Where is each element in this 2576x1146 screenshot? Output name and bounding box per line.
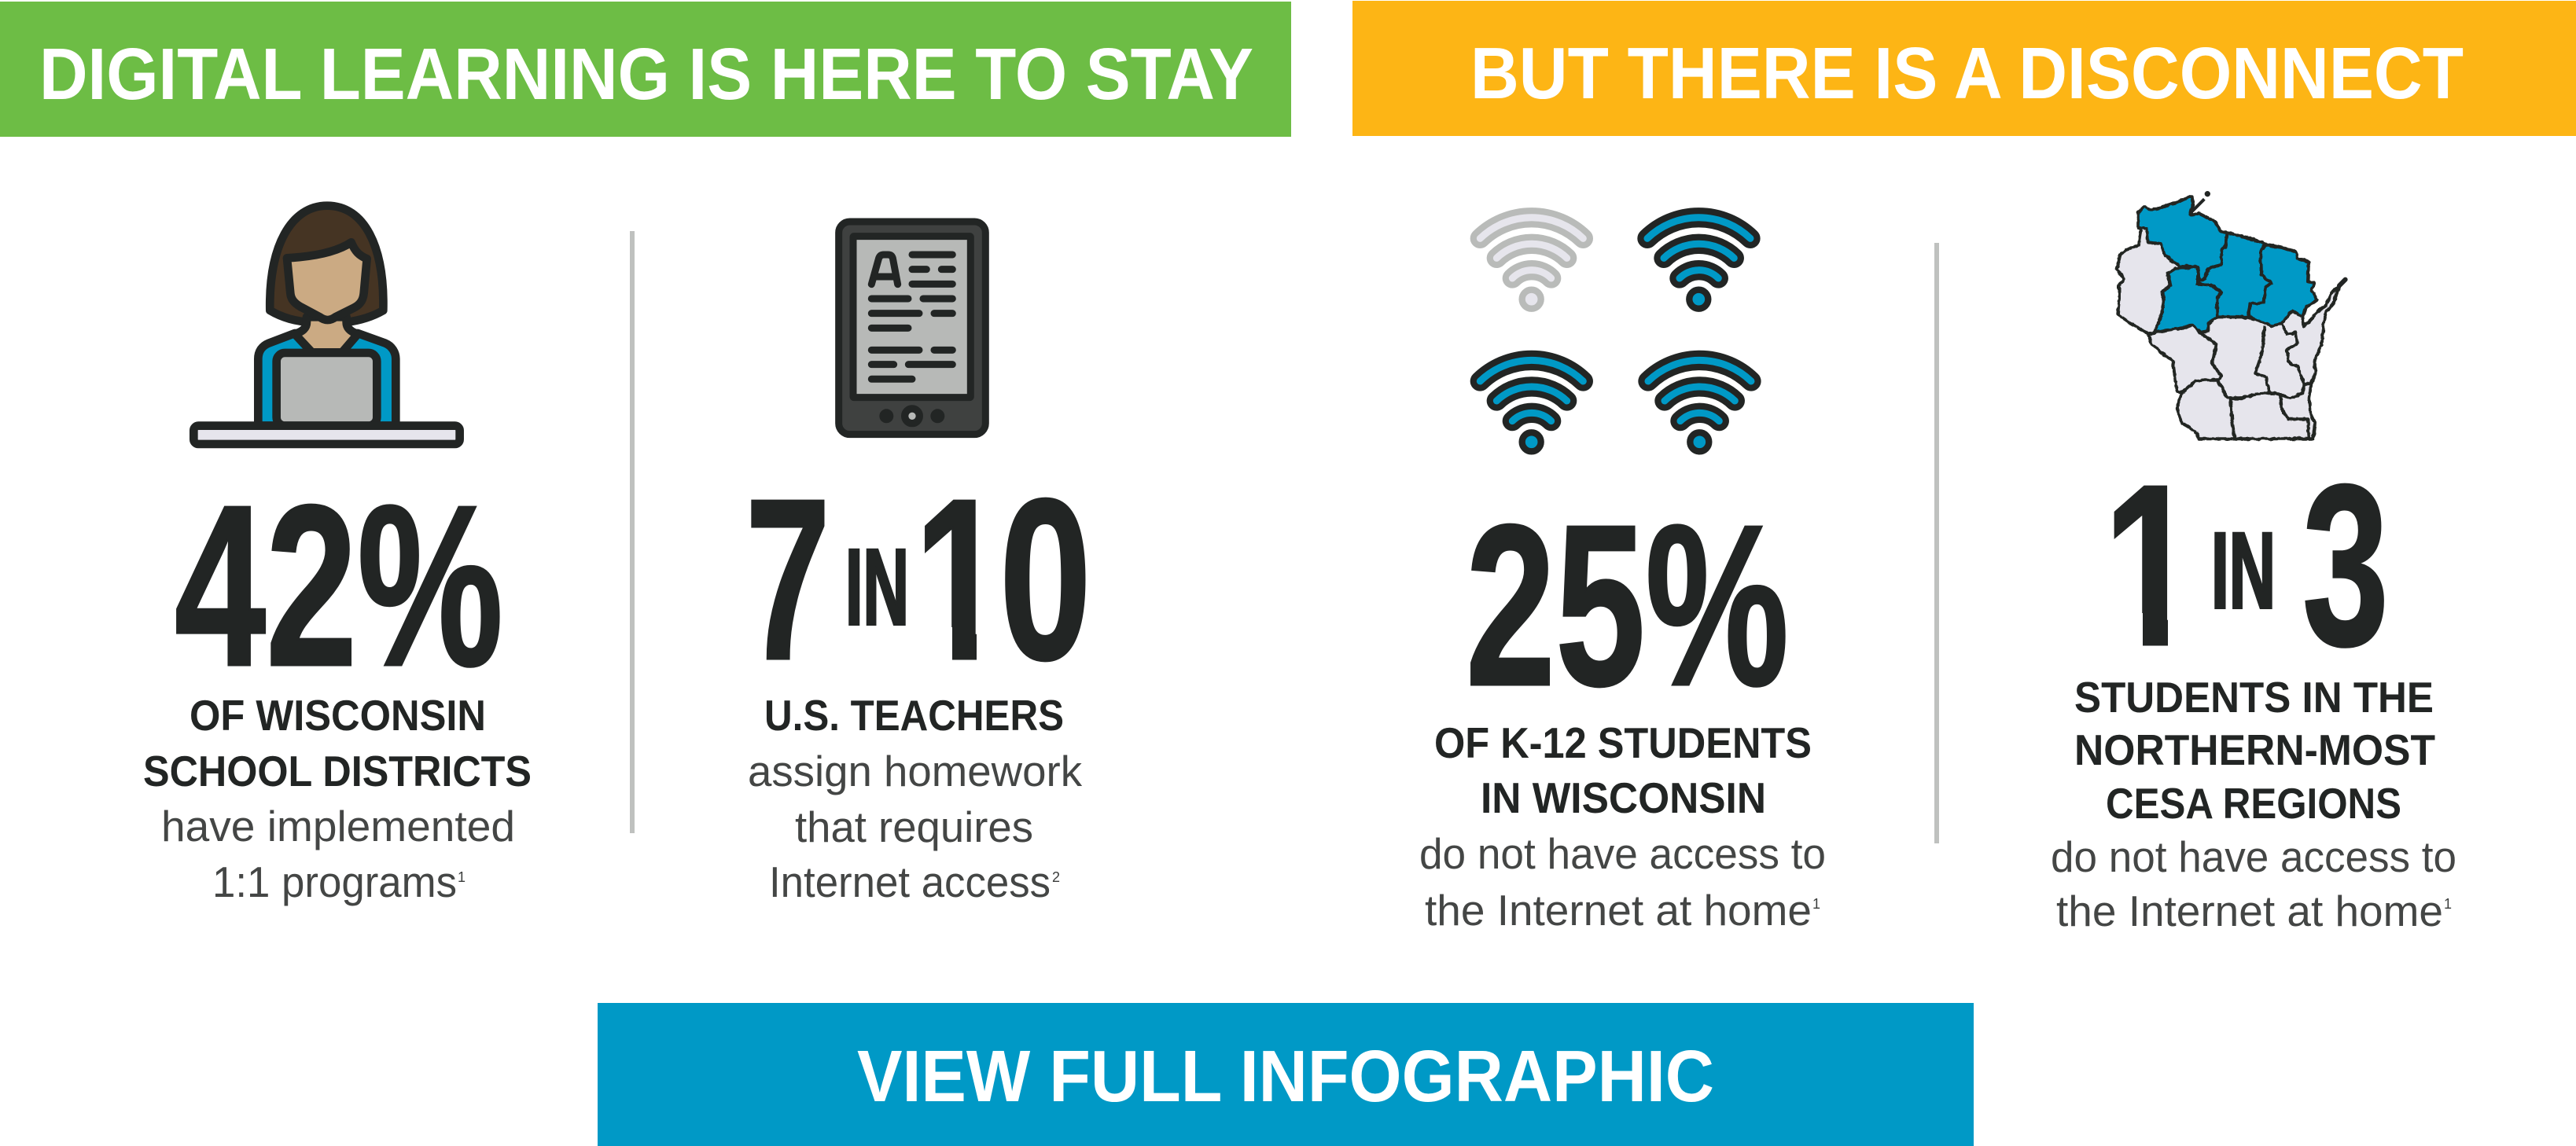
description: 1:1 programs xyxy=(212,858,457,906)
subhead xyxy=(2074,673,2435,828)
panel: 7 in 10 teachers xyxy=(745,222,1091,906)
divider xyxy=(1934,243,1939,843)
description: the Internet at home xyxy=(1425,886,1812,935)
description: assign homework xyxy=(748,747,1082,795)
divider xyxy=(630,231,635,833)
banner: digital learning xyxy=(0,2,1291,137)
button: view full infographic xyxy=(598,1003,1974,1146)
description xyxy=(1419,829,1826,935)
description xyxy=(161,802,515,906)
stat: 7 in 10 xyxy=(751,497,1085,662)
description: that requires xyxy=(795,803,1033,851)
description: have implemented xyxy=(161,802,515,850)
icon: person at laptop xyxy=(193,206,460,444)
stat: 7 in 10: 1 xyxy=(914,451,1005,707)
description xyxy=(748,747,1082,906)
icon: Wisconsin CESA map xyxy=(2117,193,2346,439)
description: do not have access to xyxy=(2051,832,2456,881)
subhead: OF K-12 STUDENTS xyxy=(1434,718,1812,767)
icon: wifi blue 1 xyxy=(1647,218,1750,309)
description: 2 xyxy=(1052,869,1060,885)
banner: digital learning: DIGITAL LEARNING IS HERE TO STAY xyxy=(39,33,1253,115)
banner: disconnect: BUT THERE IS A DISCONNECT xyxy=(1470,32,2464,114)
subhead: IN WISCONSIN xyxy=(1481,773,1766,822)
button: view full infographic: VIEW FULL INFOGRAPHIC xyxy=(857,1035,1714,1117)
description: 1 xyxy=(2444,896,2452,912)
stat: 1 in 3: 1 xyxy=(2103,437,2198,693)
icon: wifi gray xyxy=(1480,218,1583,309)
icon: wifi blue 3 xyxy=(1648,360,1751,451)
stat: 7 in 10: 7 xyxy=(745,451,830,707)
icon: wifi blue 2 xyxy=(1480,360,1583,451)
description: 1 xyxy=(1812,896,1820,912)
stat: 7 in 10: 0 xyxy=(999,451,1091,707)
subhead: STUDENTS IN THE xyxy=(2074,673,2434,722)
subhead: SCHOOL DISTRICTS xyxy=(143,747,532,795)
banner: disconnect xyxy=(1352,1,2576,136)
subhead: CESA REGIONS xyxy=(2106,779,2401,828)
description: 1 xyxy=(458,869,466,885)
description: do not have access to xyxy=(1419,829,1826,878)
stat: 25%: 25% xyxy=(1466,477,1789,733)
subhead xyxy=(1434,718,1812,822)
panel: 1 in 3 students xyxy=(2051,193,2456,935)
panel: 42% of school districts xyxy=(143,206,532,906)
stat: 7 in 10: IN xyxy=(845,527,909,648)
stat: 1 in 3: IN xyxy=(2211,511,2276,631)
stat: 42%: 42% xyxy=(175,457,503,714)
subhead: NORTHERN-MOST xyxy=(2074,725,2435,774)
subhead xyxy=(143,691,532,795)
description: Internet access xyxy=(769,858,1051,906)
stat: 1 in 3: 3 xyxy=(2302,437,2389,693)
description xyxy=(2051,832,2456,935)
description: the Internet at home xyxy=(2056,887,2443,935)
subhead: U.S. TEACHERS xyxy=(764,691,1064,740)
panel: 25% of K-12 students xyxy=(1419,218,1826,935)
stat: 1 in 3 xyxy=(2114,483,2384,648)
subhead: OF WISCONSIN xyxy=(190,691,486,740)
icon: e-reader xyxy=(839,222,985,435)
icon: wifi grid xyxy=(1480,218,1751,451)
